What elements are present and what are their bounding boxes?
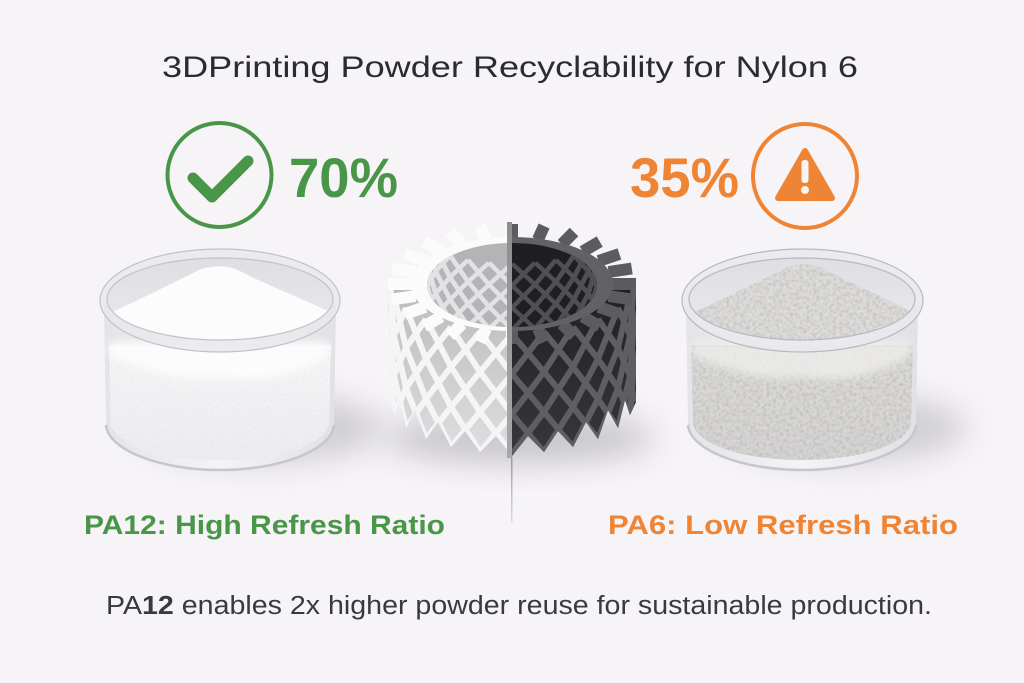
bowl rim xyxy=(682,249,923,352)
bowl interior xyxy=(689,258,915,340)
stat: 70%: 70% xyxy=(289,146,398,209)
ring: dark half xyxy=(512,224,636,456)
powder heap: PA6 xyxy=(696,264,910,340)
bowl: gray PA6 powder xyxy=(682,249,923,470)
label: PA6: PA6: Low Refresh Ratio xyxy=(608,510,958,540)
lattice ring part xyxy=(388,222,636,458)
powder: PA6 lower fill xyxy=(691,345,913,460)
powder: PA6 upper band xyxy=(692,342,912,379)
title: 3DPrinting Powder Recyclability for Nylon 6 xyxy=(162,51,858,84)
center divider line xyxy=(511,457,512,523)
bowl shadows xyxy=(140,394,967,464)
bowl: white PA12 powder xyxy=(100,249,340,470)
infographic canvas xyxy=(86,56,972,620)
label: PA12: PA12: High Refresh Ratio xyxy=(84,510,445,540)
center divider bar xyxy=(507,222,512,458)
powder: PA12 upper white band xyxy=(110,342,330,379)
bowl rim xyxy=(100,249,340,352)
takeaway sentence: PA12 enables 2x higher powder reuse for sustainable production. xyxy=(106,592,932,620)
powder heap: PA12 xyxy=(114,266,328,340)
powder: PA12 lower fill xyxy=(109,345,331,460)
stat: 35%: 35% xyxy=(630,146,739,209)
ring: light half xyxy=(388,243,507,452)
bowl interior xyxy=(107,258,333,340)
icon: orange warning circle xyxy=(753,124,857,228)
icon: green check circle xyxy=(168,123,272,227)
